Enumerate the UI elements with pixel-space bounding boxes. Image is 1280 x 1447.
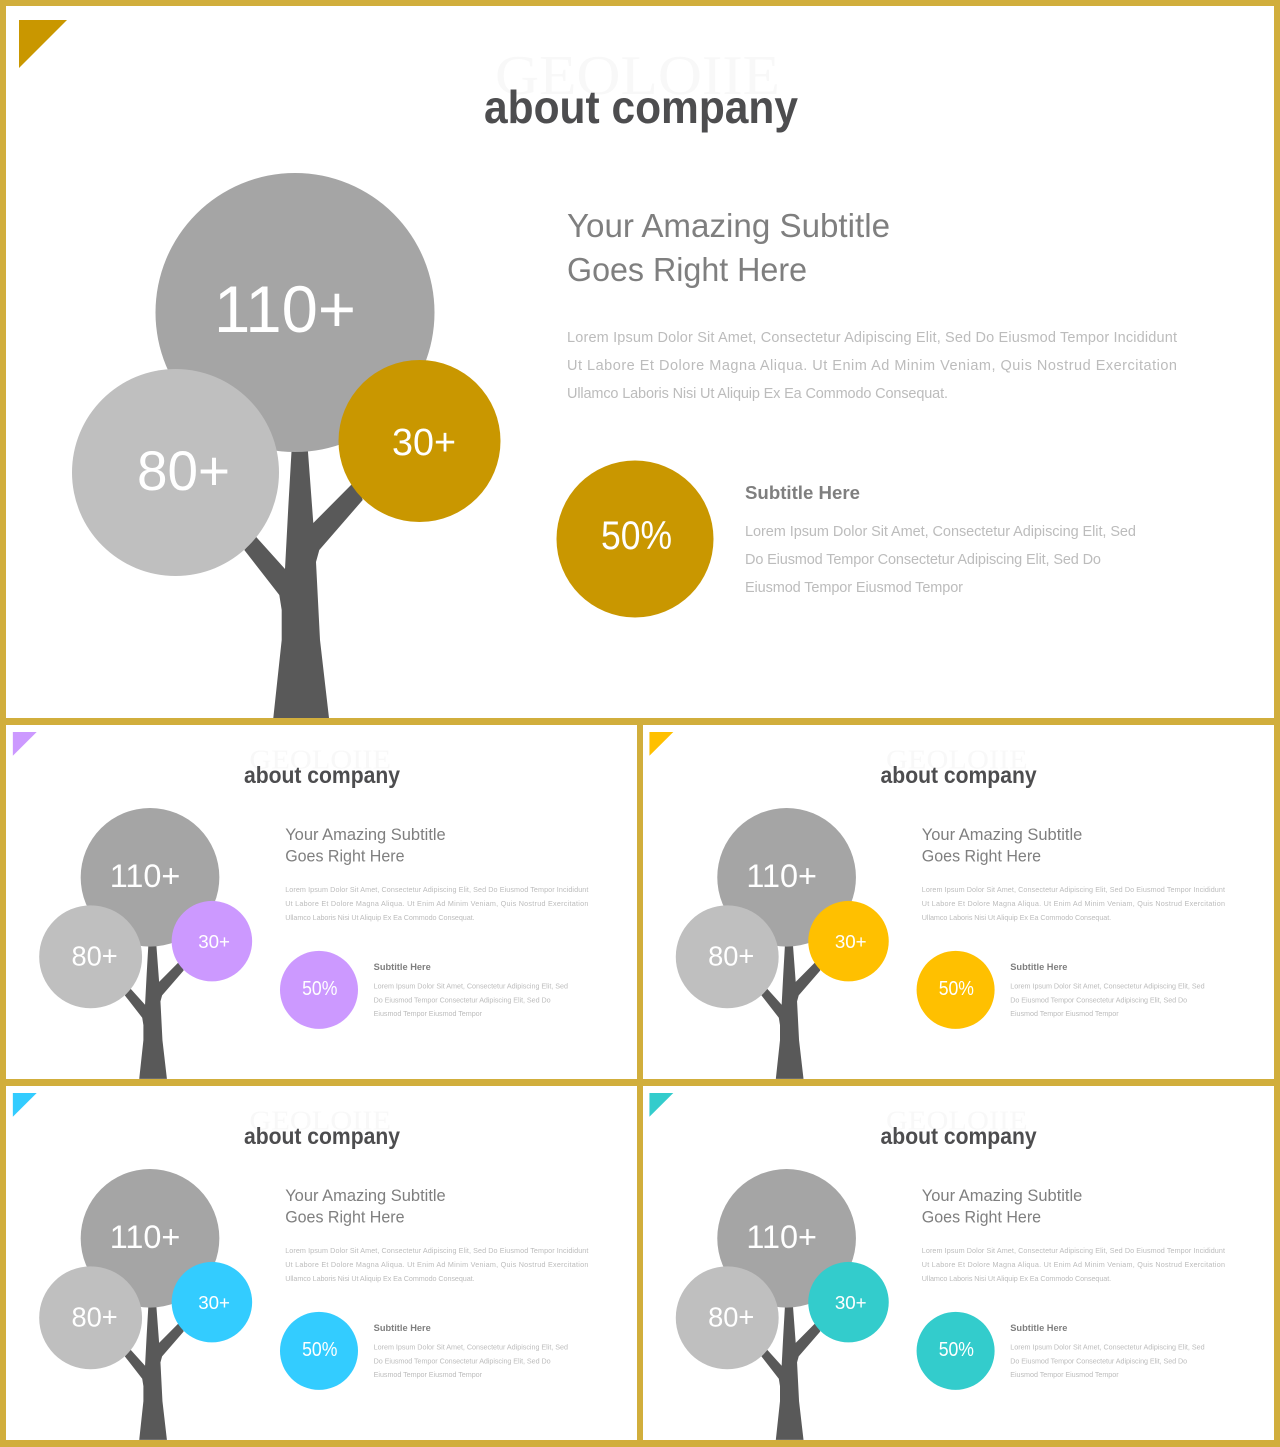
body text: Ullamco Laboris Nisi Ut Aliquip Ex Ea Commodo Consequat.	[922, 1274, 1111, 1283]
panel: slide teal	[643, 1086, 1274, 1440]
circle: 110+: 110+	[214, 272, 356, 346]
circle: 110+	[717, 1169, 856, 1308]
small body text: Lorem Ipsum Dolor Sit Amet, Consectetur Adipiscing Elit, Sed	[745, 524, 1136, 540]
subtitle heading	[567, 207, 890, 288]
circle: 110+	[81, 1169, 219, 1308]
small body text: Do Eiusmod Tempor Consectetur Adipiscing Elit, Sed Do	[374, 1356, 551, 1365]
title: about company	[881, 1123, 1037, 1149]
small body text	[374, 1342, 568, 1379]
subtitle heading	[285, 1187, 446, 1227]
small body text: Lorem Ipsum Dolor Sit Amet, Consectetur Adipiscing Elit, Sed	[1010, 1342, 1205, 1351]
body text: Lorem Ipsum Dolor Sit Amet, Consectetur Adipiscing Elit, Sed Do Eiusmod Tempor Incididunt	[285, 1246, 588, 1255]
tree trunk	[761, 1306, 820, 1440]
body text: Lorem Ipsum Dolor Sit Amet, Consectetur Adipiscing Elit, Sed Do Eiusmod Tempor Incididunt	[922, 885, 1225, 894]
circle: 80+: 80+	[137, 439, 230, 502]
icon: corner triangle	[649, 1093, 673, 1117]
circle: 110+: 110+	[110, 1218, 180, 1255]
small body text: Eiusmod Tempor Eiusmod Tempor	[1010, 1009, 1119, 1018]
small body text: Lorem Ipsum Dolor Sit Amet, Consectetur Adipiscing Elit, Sed	[374, 981, 568, 990]
panel: main slide gold	[6, 6, 1274, 718]
circle: 50%	[556, 460, 714, 618]
body text: Ut Labore Et Dolore Magna Aliqua. Ut Enim Ad Minim Veniam, Quis Nostrud Exercitation	[922, 899, 1225, 908]
circle: 80+: 80+	[708, 941, 754, 972]
small body text	[374, 981, 568, 1018]
circle: 30+: 30+	[198, 1293, 230, 1314]
circle: 80+: 80+	[71, 1302, 118, 1333]
ghost heading: GEOLOIIE	[886, 745, 1028, 776]
small subtitle: Subtitle Here	[745, 483, 860, 503]
body text	[922, 1246, 1225, 1283]
small body text: Lorem Ipsum Dolor Sit Amet, Consectetur Adipiscing Elit, Sed	[374, 1342, 568, 1351]
body text: Ut Labore Et Dolore Magna Aliqua. Ut Enim Ad Minim Veniam, Quis Nostrud Exercitation	[285, 899, 588, 908]
circle: 30+	[338, 360, 500, 522]
panel: slide blue	[6, 1086, 637, 1440]
tree trunk	[125, 1306, 184, 1440]
circle: 80+	[39, 1266, 142, 1369]
subtitle heading: Goes Right Here	[922, 1209, 1041, 1227]
subtitle heading	[285, 826, 446, 866]
title: about company	[484, 81, 798, 133]
circle: 80+	[39, 905, 142, 1008]
panel: slide yellow	[643, 725, 1274, 1079]
body text: Ut Labore Et Dolore Magna Aliqua. Ut Enim Ad Minim Veniam, Quis Nostrud Exercitation	[567, 358, 1177, 374]
ghost heading: GEOLOIIE	[886, 1106, 1028, 1137]
ghost heading: GEOLOIIE	[249, 745, 391, 776]
circle: 50%	[280, 951, 358, 1029]
small body text: Eiusmod Tempor Eiusmod Tempor	[374, 1370, 483, 1379]
circle: 50%: 50%	[601, 514, 672, 558]
circle: 30+	[172, 1262, 252, 1342]
body text: Ullamco Laboris Nisi Ut Aliquip Ex Ea Commodo Consequat.	[285, 1274, 475, 1283]
body text: Ullamco Laboris Nisi Ut Aliquip Ex Ea Commodo Consequat.	[567, 386, 948, 402]
tree trunk	[125, 945, 184, 1079]
title: about company	[244, 762, 400, 788]
circle: 110+	[81, 808, 219, 947]
body text: Lorem Ipsum Dolor Sit Amet, Consectetur Adipiscing Elit, Sed Do Eiusmod Tempor Incididunt	[285, 885, 588, 894]
circle: 80+: 80+	[708, 1302, 754, 1333]
small body text: Do Eiusmod Tempor Consectetur Adipiscing Elit, Sed Do	[1010, 1356, 1187, 1365]
icon: corner triangle	[13, 732, 37, 756]
circle: 50%: 50%	[302, 1339, 337, 1361]
ghost heading: GEOLOIIE	[495, 45, 780, 107]
icon: corner triangle	[13, 1093, 37, 1117]
circle: 30+: 30+	[392, 422, 456, 464]
small subtitle: Subtitle Here	[374, 1323, 431, 1333]
subtitle heading: Goes Right Here	[285, 1209, 404, 1227]
panel: slide purple	[6, 725, 637, 1079]
circle: 80+: 80+	[71, 941, 118, 972]
tree trunk	[761, 945, 820, 1079]
body text: Ullamco Laboris Nisi Ut Aliquip Ex Ea Commodo Consequat.	[922, 913, 1111, 922]
circle: 30+	[808, 1262, 889, 1342]
body text	[567, 330, 1177, 402]
icon: corner triangle	[649, 732, 673, 756]
small body text: Eiusmod Tempor Eiusmod Tempor	[374, 1009, 483, 1018]
circle: 30+	[172, 901, 252, 981]
tree trunk	[244, 448, 363, 718]
small body text	[1010, 1342, 1205, 1379]
subtitle heading: Your Amazing Subtitle	[922, 1187, 1082, 1205]
circle: 110+: 110+	[110, 857, 180, 894]
body text	[285, 1246, 588, 1283]
small body text: Do Eiusmod Tempor Consectetur Adipiscing Elit, Sed Do	[745, 552, 1101, 568]
subtitle heading: Goes Right Here	[285, 848, 404, 866]
body text	[285, 885, 588, 922]
circle: 50%	[917, 1312, 995, 1390]
circle: 80+	[676, 905, 779, 1008]
body text: Lorem Ipsum Dolor Sit Amet, Consectetur Adipiscing Elit, Sed Do Eiusmod Tempor Incididunt	[922, 1246, 1225, 1255]
title: about company	[244, 1123, 400, 1149]
circle: 50%	[917, 951, 995, 1029]
circle: 110+: 110+	[746, 1218, 817, 1255]
subtitle heading: Your Amazing Subtitle	[285, 826, 446, 844]
small body text: Do Eiusmod Tempor Consectetur Adipiscing Elit, Sed Do	[374, 995, 551, 1004]
circle: 80+	[72, 369, 279, 576]
body text: Ullamco Laboris Nisi Ut Aliquip Ex Ea Commodo Consequat.	[285, 913, 475, 922]
small subtitle: Subtitle Here	[1010, 1323, 1067, 1333]
small body text: Lorem Ipsum Dolor Sit Amet, Consectetur Adipiscing Elit, Sed	[1010, 981, 1205, 990]
subtitle heading: Goes Right Here	[567, 251, 807, 288]
subtitle heading: Your Amazing Subtitle	[922, 826, 1082, 844]
circle: 110+: 110+	[746, 857, 817, 894]
circle: 30+	[808, 901, 889, 981]
circle: 50%: 50%	[939, 978, 974, 1000]
icon: corner triangle	[19, 20, 67, 68]
circle: 30+: 30+	[835, 1293, 867, 1314]
small body text	[1010, 981, 1205, 1018]
subtitle heading: Goes Right Here	[922, 848, 1041, 866]
small subtitle: Subtitle Here	[1010, 962, 1067, 972]
circle: 30+: 30+	[835, 932, 867, 953]
circle: 50%	[280, 1312, 358, 1390]
title: about company	[881, 762, 1037, 788]
body text	[922, 885, 1225, 922]
circle: 110+	[156, 173, 434, 452]
body text: Lorem Ipsum Dolor Sit Amet, Consectetur Adipiscing Elit, Sed Do Eiusmod Tempor Incididunt	[567, 330, 1177, 346]
small body text: Eiusmod Tempor Eiusmod Tempor	[1010, 1370, 1119, 1379]
subtitle heading: Your Amazing Subtitle	[285, 1187, 446, 1205]
circle: 80+	[676, 1266, 779, 1369]
circle: 110+	[717, 808, 856, 947]
small body text	[745, 524, 1136, 596]
body text: Ut Labore Et Dolore Magna Aliqua. Ut Enim Ad Minim Veniam, Quis Nostrud Exercitation	[922, 1260, 1225, 1269]
subtitle heading	[922, 1187, 1082, 1227]
small body text: Eiusmod Tempor Eiusmod Tempor	[745, 580, 963, 596]
body text: Ut Labore Et Dolore Magna Aliqua. Ut Enim Ad Minim Veniam, Quis Nostrud Exercitation	[285, 1260, 588, 1269]
ghost heading: GEOLOIIE	[249, 1106, 391, 1137]
small body text: Do Eiusmod Tempor Consectetur Adipiscing Elit, Sed Do	[1010, 995, 1187, 1004]
subtitle heading	[922, 826, 1082, 866]
circle: 30+: 30+	[198, 932, 230, 953]
subtitle heading: Your Amazing Subtitle	[567, 207, 890, 244]
circle: 50%: 50%	[302, 978, 337, 1000]
circle: 50%: 50%	[939, 1339, 974, 1361]
small subtitle: Subtitle Here	[374, 962, 431, 972]
